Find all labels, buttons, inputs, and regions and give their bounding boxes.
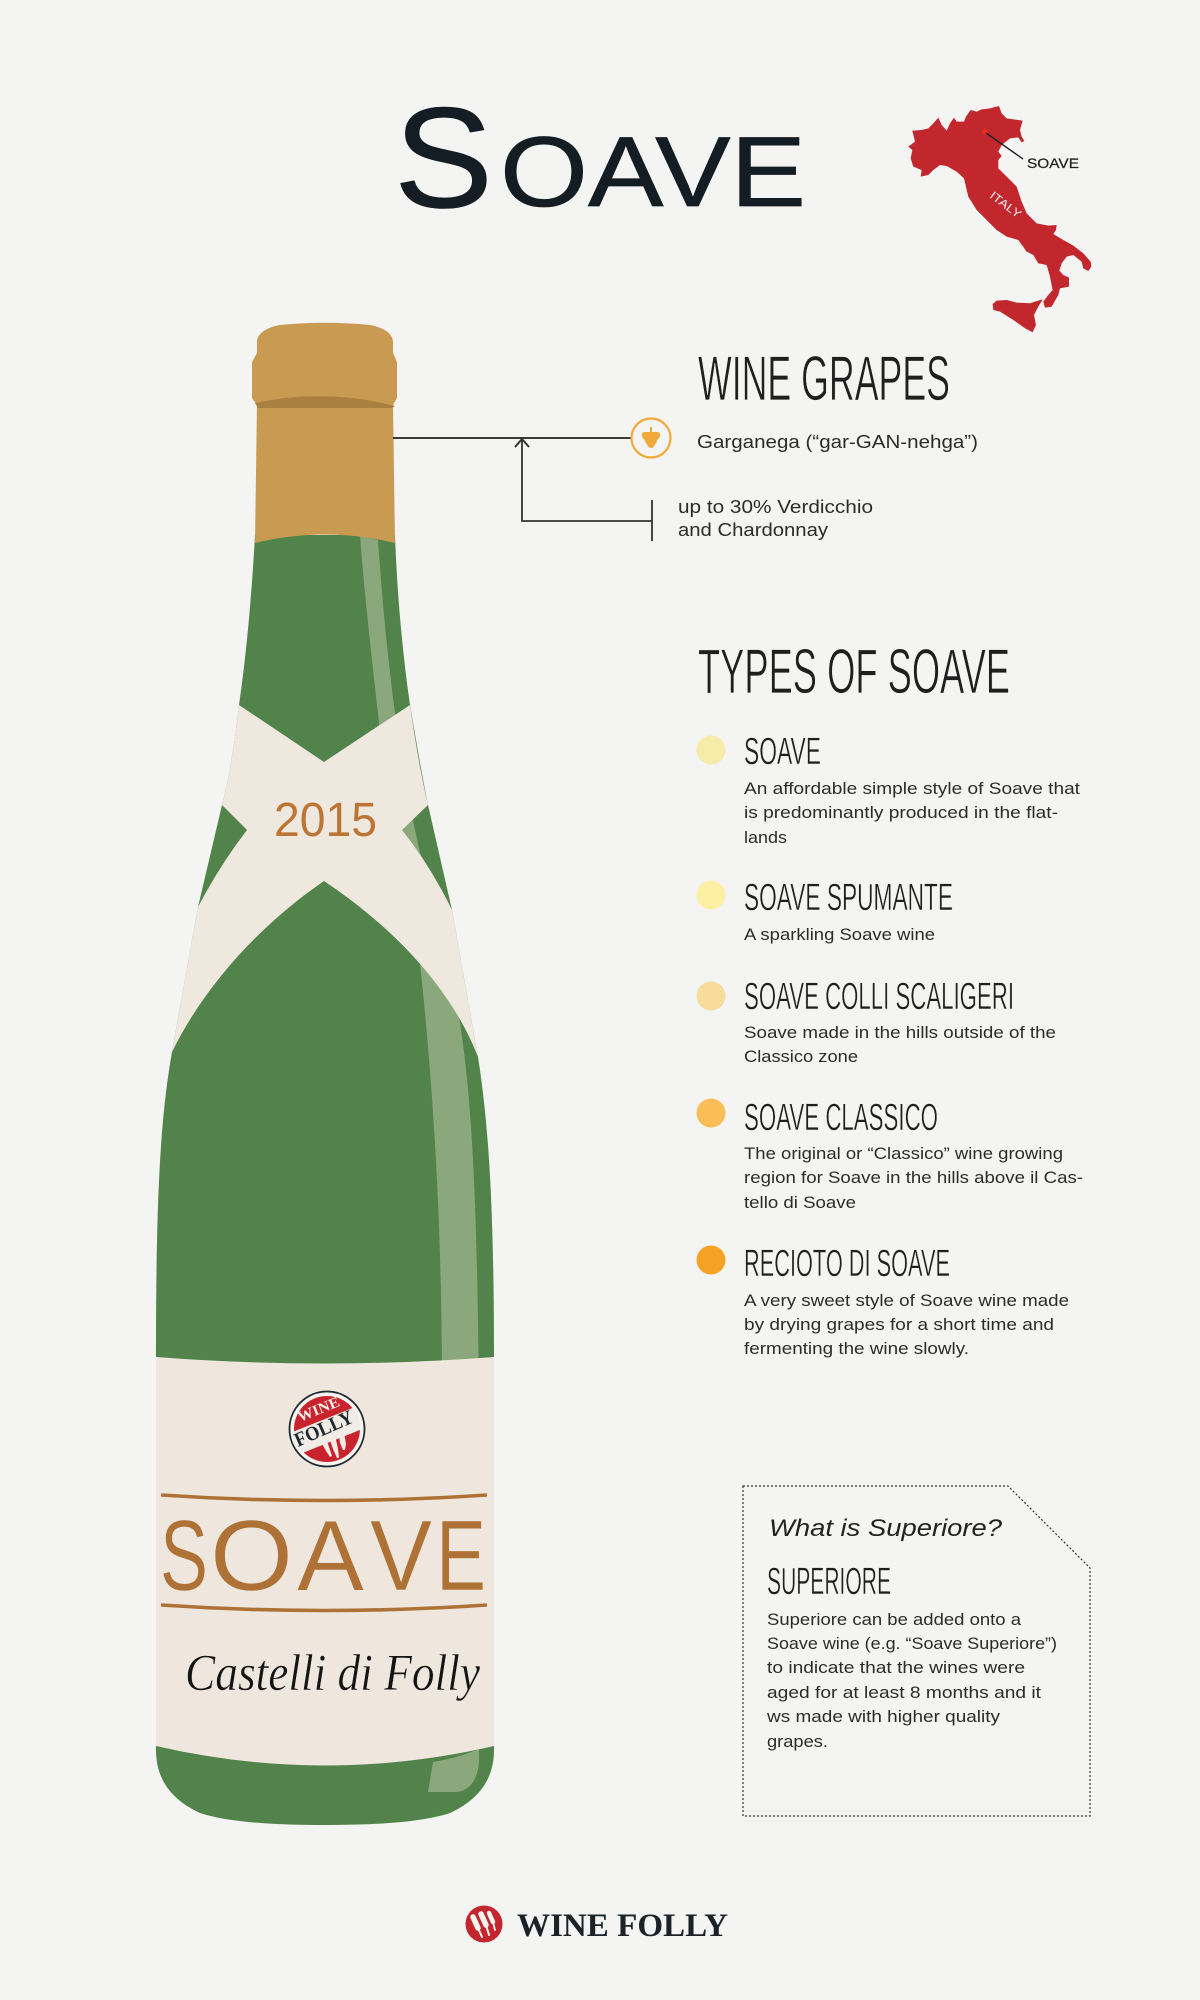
description: by drying grapes for a short time and [744, 1315, 1054, 1334]
map label: italy: ITALY [987, 190, 1023, 221]
main label [156, 1357, 494, 1766]
colour dot [696, 982, 726, 1010]
connector: garganega line [393, 418, 670, 458]
label title: O [210, 1500, 293, 1612]
label title rules [161, 1495, 487, 1610]
description: A sparkling Soave wine [744, 925, 935, 944]
description: The original or “Classico” wine growing [744, 1144, 1063, 1163]
body text: Soave wine (e.g. “Soave Superiore”) [767, 1634, 1057, 1653]
description: An affordable simple style of Soave that [744, 779, 1080, 798]
question: What is Superiore? [769, 1515, 1003, 1542]
label title: V [370, 1500, 432, 1612]
type name: SOAVE SPUMANTE [744, 877, 953, 919]
body text [766, 1610, 1057, 1751]
connector: blending grapes arrow [515, 439, 652, 541]
type name: RECIOTO DI SOAVE [744, 1243, 950, 1285]
label title: E [436, 1500, 486, 1612]
type: recioto di soave [696, 1243, 1069, 1358]
italy mainland [908, 106, 1091, 308]
soave location marker [982, 129, 1023, 159]
body text: Superiore can be added onto a [767, 1610, 1022, 1629]
glass highlight [360, 536, 479, 1400]
colour dot [696, 1098, 726, 1128]
type: soave colli scaligeri [696, 976, 1056, 1066]
description [744, 1144, 1083, 1212]
bottle illustration [156, 323, 494, 1825]
wine folly badge: WINE [296, 1394, 342, 1426]
panel: what is superiore [743, 1486, 1090, 1816]
subheading: SUPERIORE [767, 1561, 891, 1603]
colour dot [696, 736, 726, 764]
type name: SOAVE COLLI SCALIGERI [744, 976, 1014, 1018]
title [394, 79, 806, 238]
bottle glass [156, 535, 494, 1825]
description: fermenting the wine slowly. [744, 1339, 969, 1358]
description [744, 1291, 1069, 1358]
description: Soave made in the hills outside of the [744, 1023, 1056, 1042]
wine folly badge: FOLLY [291, 1406, 357, 1452]
logo wordmark: WINE FOLLY [517, 1908, 728, 1944]
dashed box [743, 1486, 1090, 1816]
text: blending grapes: and Chardonnay [678, 520, 828, 540]
wine folly badge [288, 1390, 366, 1468]
label title [160, 1500, 486, 1612]
description: tello di Soave [744, 1193, 856, 1212]
title: S [394, 79, 493, 238]
body text: to indicate that the wines were [767, 1658, 1025, 1677]
type name: SOAVE CLASSICO [744, 1097, 938, 1139]
colour dot [696, 880, 726, 910]
description [744, 1023, 1056, 1066]
text: garganega: Garganega (“gar-GAN-nehga”) [697, 432, 978, 452]
vintage year: 2015 [274, 794, 377, 847]
description: Classico zone [744, 1047, 858, 1066]
title: OAVE [500, 116, 806, 227]
map label: soave: SOAVE [1027, 155, 1079, 171]
winery name: Castelli di Folly [185, 1645, 481, 1702]
sicily [993, 299, 1043, 332]
description: region for Soave in the hills above il Cas- [744, 1168, 1083, 1187]
label title: A [297, 1500, 364, 1612]
description: lands [744, 828, 787, 847]
bottom highlight [428, 1749, 479, 1792]
type name: SOAVE [744, 731, 821, 773]
label title: S [160, 1500, 208, 1612]
description: A very sweet style of Soave wine made [744, 1291, 1069, 1310]
type: soave [696, 731, 1080, 847]
footer logo [466, 1906, 728, 1944]
neck label (crossed band) [172, 705, 478, 1057]
body text: aged for at least 8 months and it [767, 1683, 1041, 1702]
text: blending grapes [678, 497, 873, 540]
capsule [252, 323, 397, 543]
icon: grape in circle [632, 418, 670, 458]
description [744, 779, 1080, 847]
logo mark [466, 1906, 502, 1942]
colour dot [696, 1246, 726, 1274]
type: soave classico [696, 1097, 1083, 1212]
heading: wine grapes: WINE GRAPES [698, 344, 950, 414]
icon: map of Italy with Soave marker [908, 106, 1091, 332]
body text: ws made with higher quality [766, 1707, 1001, 1726]
text: blending grapes: up to 30% Verdicchio [678, 497, 873, 517]
body text: grapes. [767, 1732, 828, 1751]
description: is predominantly produced in the flat- [744, 803, 1058, 822]
type: soave spumante [696, 877, 953, 944]
